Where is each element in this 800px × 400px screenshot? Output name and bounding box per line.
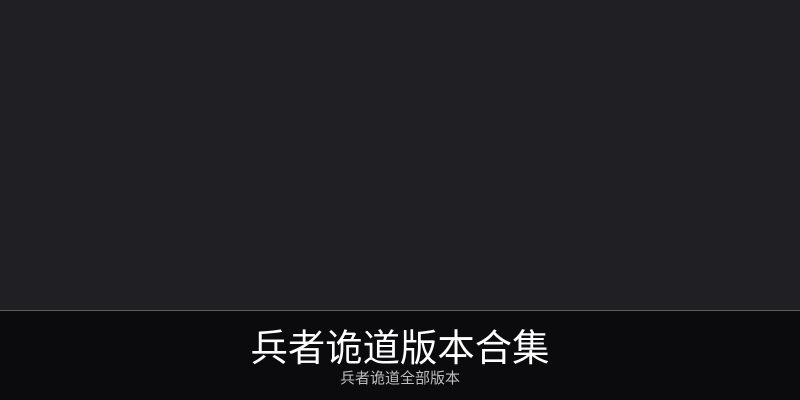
- subtitle: 兵者诡道全部版本: [340, 370, 460, 386]
- panel: dark background: [0, 0, 800, 310]
- panel: caption bar: [0, 310, 800, 400]
- title: 兵者诡道版本合集: [251, 327, 549, 369]
